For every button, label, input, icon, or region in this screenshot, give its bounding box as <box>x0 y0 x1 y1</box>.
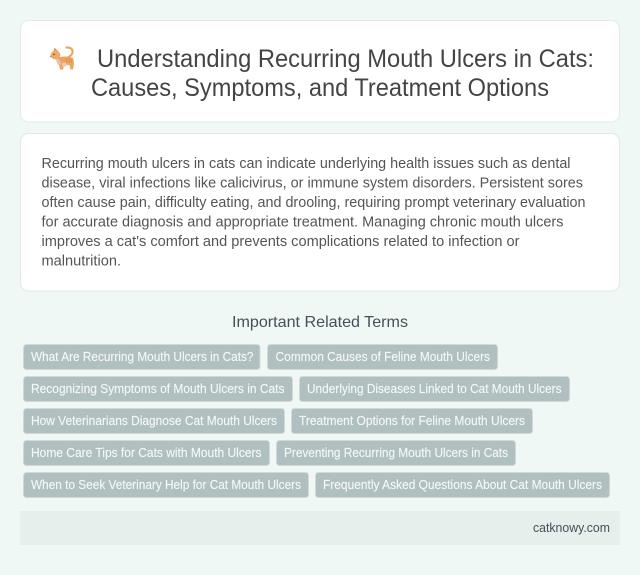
text block: summary paragraph: malnutrition. <box>42 252 121 270</box>
tag: what are recurring mouth ulcers <box>24 344 260 370</box>
panel: summary text <box>20 134 620 291</box>
text block: summary paragraph: disease, viral infections like calicivirus, or immune system disorders. Persistent sores <box>42 174 583 192</box>
tag: common causes: Common Causes of Feline Mouth Ulcers <box>276 349 490 364</box>
tag: frequently asked questions: Frequently Asked Questions About Cat Mouth Ulcers <box>323 477 602 492</box>
tag: recognizing symptoms: Recognizing Symptoms of Mouth Ulcers in Cats <box>31 381 285 396</box>
footer source text: catknowy.com <box>533 520 610 535</box>
tag: frequently asked questions <box>316 472 610 498</box>
tag: when to seek help <box>24 472 308 498</box>
text block: summary paragraph: improves a cat's comfort and prevents complications related to infection or <box>42 233 520 250</box>
heading: important related terms: Important Related Terms <box>232 314 408 331</box>
tag: how veterinarians diagnose: How Veterinarians Diagnose Cat Mouth Ulcers <box>31 413 277 428</box>
tag: recognizing symptoms <box>24 376 292 402</box>
text block: summary paragraph <box>42 155 586 270</box>
tag: underlying diseases: Underlying Diseases Linked to Cat Mouth Ulcers <box>307 381 562 396</box>
text block: summary paragraph: often cause pain, difficulty eating, and drooling, requiring prompt veterinary evaluation <box>42 194 586 211</box>
tag: underlying diseases <box>300 376 570 402</box>
tag: home care tips <box>24 440 270 466</box>
tag: preventing recurring ulcers <box>276 440 516 466</box>
tag: home care tips: Home Care Tips for Cats with Mouth Ulcers <box>31 445 262 460</box>
tag: common causes <box>268 344 498 370</box>
tag: preventing recurring ulcers: Preventing Recurring Mouth Ulcers in Cats <box>284 445 508 460</box>
footer bar <box>20 511 620 545</box>
tag: how veterinarians diagnose <box>24 408 284 434</box>
text block: summary paragraph: for accurate diagnosis and appropriate treatment. Managing chronic mouth ulcers <box>42 214 564 230</box>
heading: title: Causes, Symptoms, and Treatment Options <box>91 74 549 102</box>
tag: treatment options <box>292 408 532 434</box>
tag: what are recurring mouth ulcers: What Are Recurring Mouth Ulcers in Cats? <box>31 349 254 364</box>
heading: title: Understanding Recurring Mouth Ulcers in Cats: <box>97 45 594 73</box>
tag list: related terms <box>24 344 610 498</box>
title panel <box>20 20 620 122</box>
icon: orange cat <box>50 48 74 70</box>
tag: when to seek help: When to Seek Veterinary Help for Cat Mouth Ulcers <box>31 477 301 492</box>
text block: summary paragraph: Recurring mouth ulcers in cats can indicate underlying health issues such as dental <box>42 155 570 172</box>
heading: title <box>91 45 594 102</box>
tag: treatment options: Treatment Options for Feline Mouth Ulcers <box>299 413 525 428</box>
